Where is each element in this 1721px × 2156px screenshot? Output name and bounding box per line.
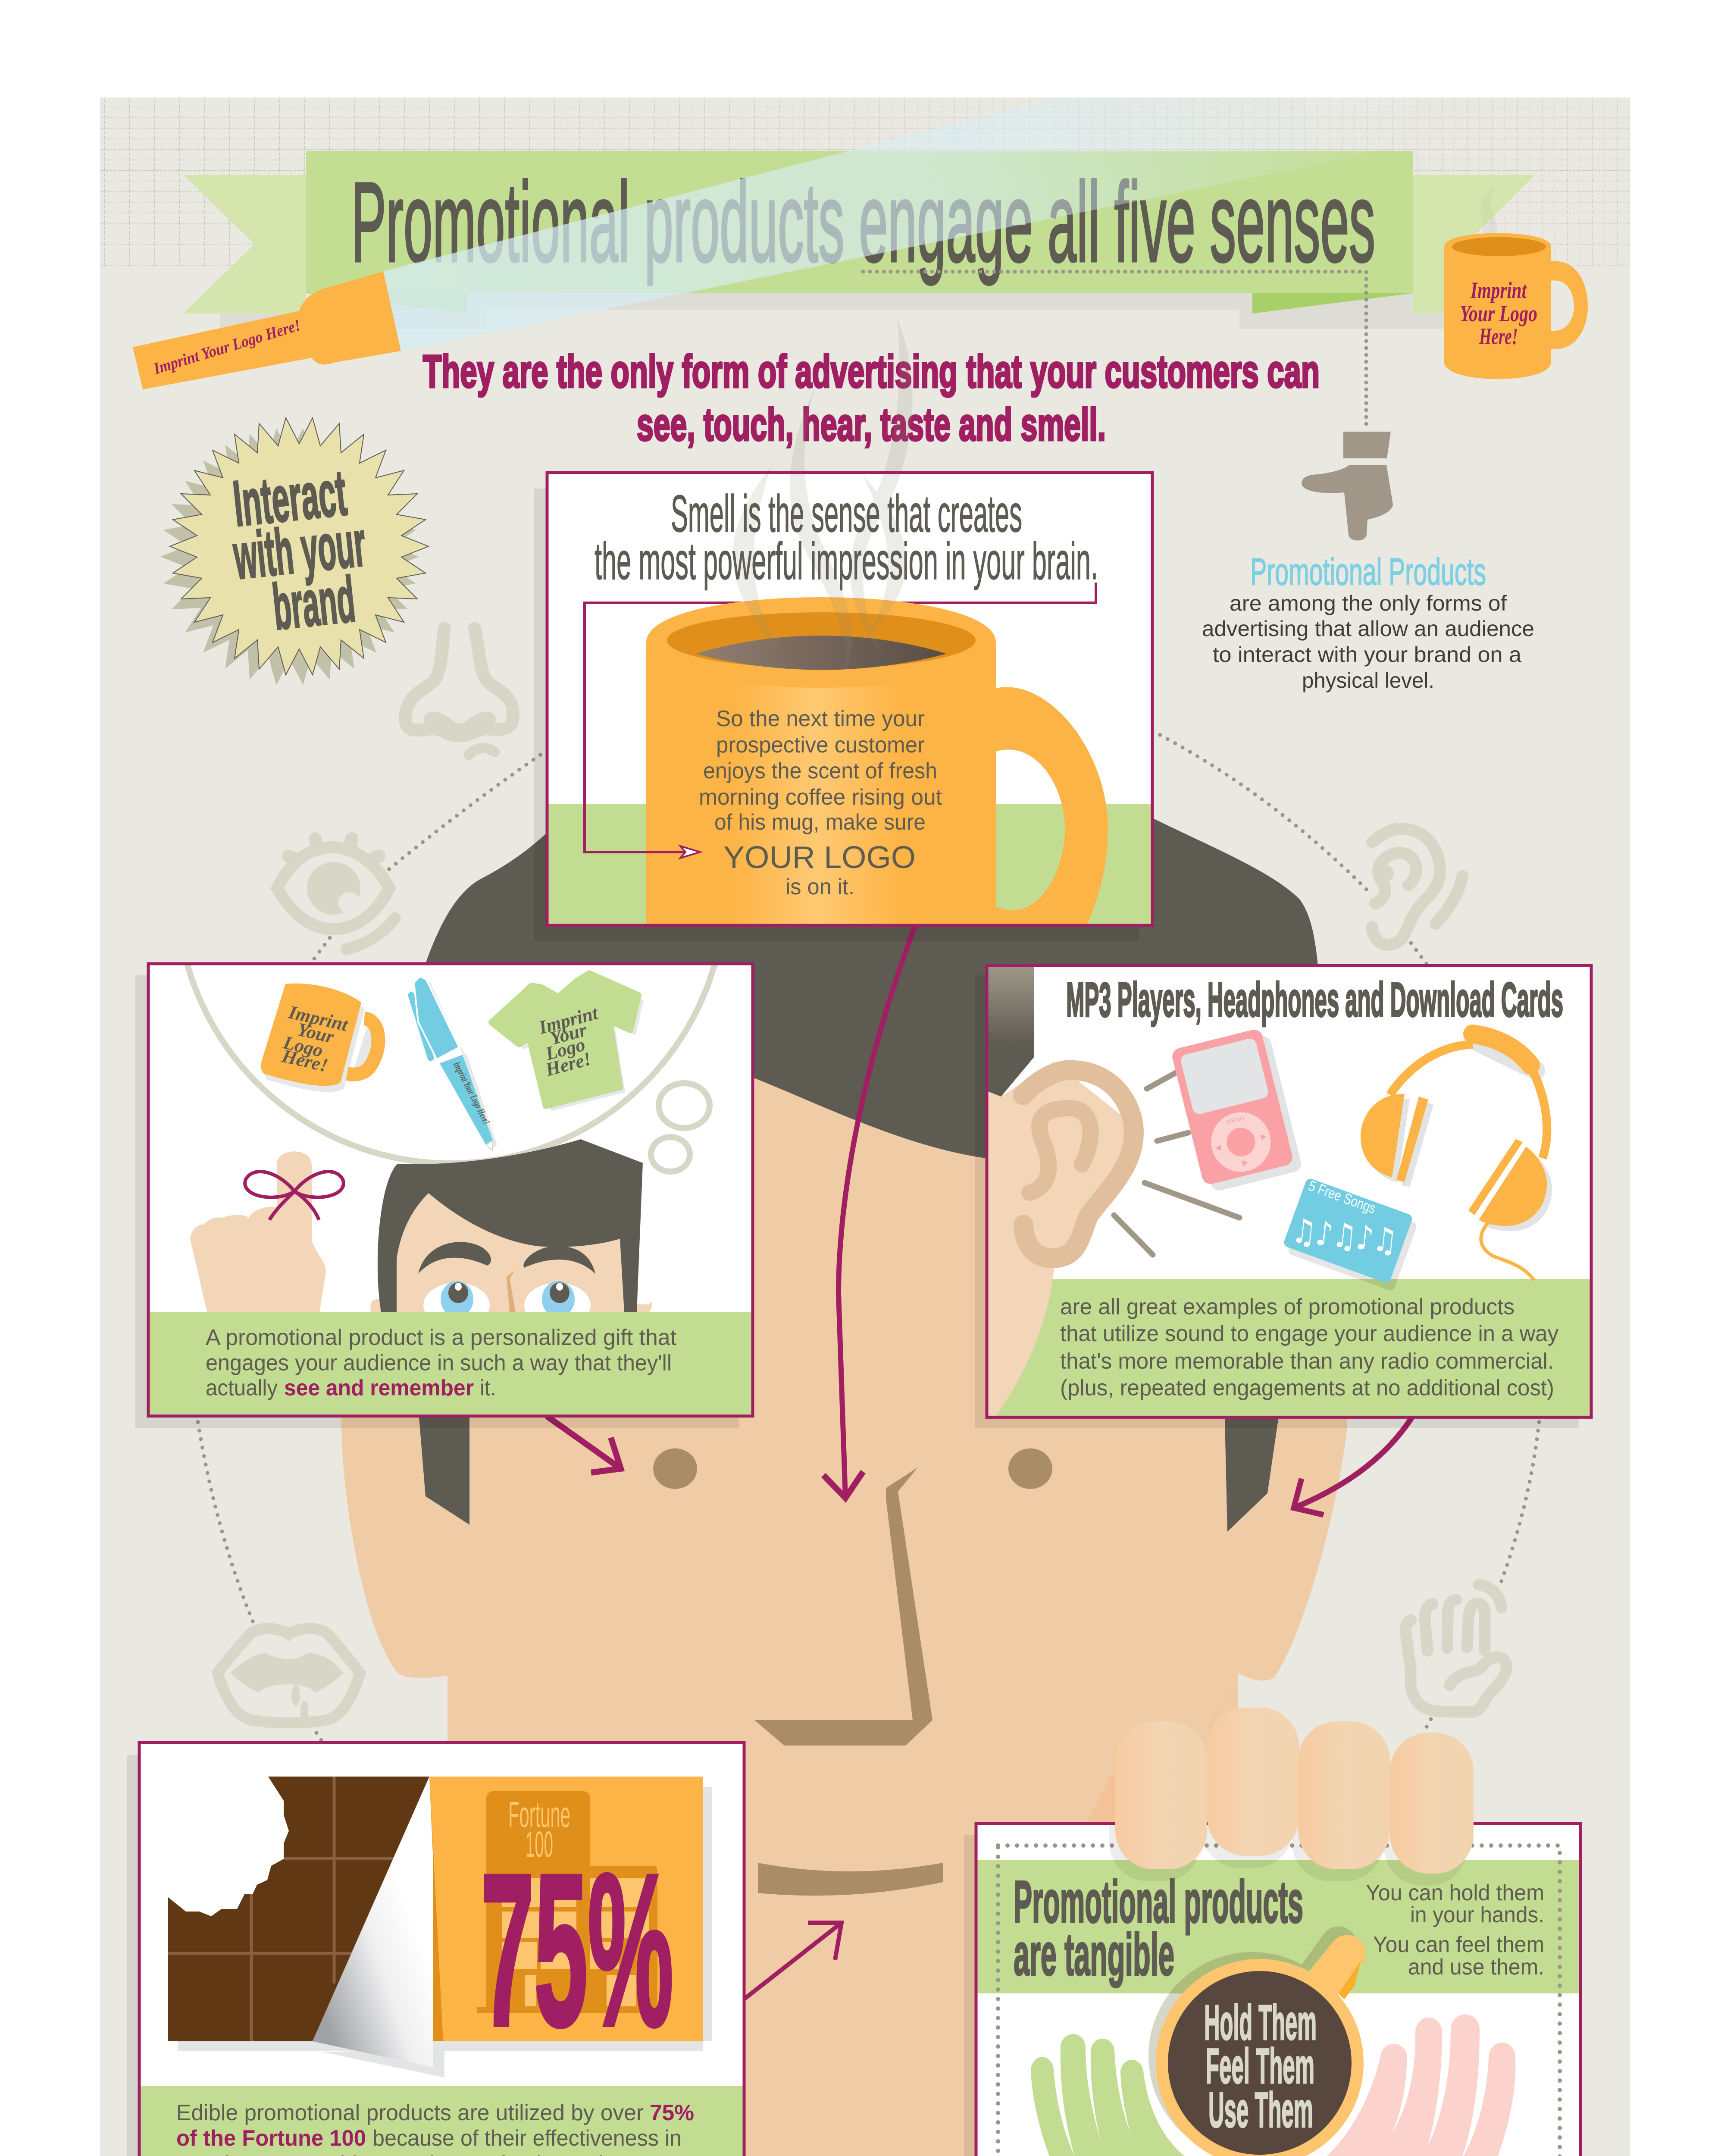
- pink hand: [1270, 2014, 1547, 2156]
- face and neck: [341, 1078, 1347, 2156]
- thought: pen: Imprint Your Logo Here!: [451, 1059, 492, 1126]
- touch text: [1366, 1880, 1544, 1980]
- thought: shirt: Imprint: [536, 1002, 601, 1038]
- hair piece: [987, 965, 1034, 1097]
- touch text: You can hold them: [1366, 1880, 1544, 1905]
- fortune 100 building: 100: [526, 1824, 553, 1865]
- touch text: and use them.: [1408, 1955, 1544, 1980]
- headphones: [1361, 1034, 1552, 1281]
- chocolate bar: [168, 1777, 429, 2041]
- connector line: [585, 583, 1096, 852]
- arrow: smell: [823, 925, 915, 1498]
- steam: [733, 317, 913, 673]
- thought: mug: Logo: [281, 1031, 325, 1061]
- mug text: enjoys the scent of fresh: [703, 758, 937, 783]
- icon: eye: [277, 839, 395, 949]
- smell heading: [595, 484, 1098, 590]
- taste caption: [176, 2100, 694, 2156]
- coffee cup from above: Use Them: [1208, 2083, 1313, 2138]
- wrapper: [429, 1777, 703, 2071]
- callout: promotional products: Promotional Products: [1250, 550, 1486, 593]
- cup shadow: [1148, 1945, 1356, 2156]
- mug text: morning coffee rising out: [699, 785, 942, 810]
- character head: [113, 818, 1606, 2156]
- mug handle: [1551, 261, 1588, 349]
- right sideburn: [1224, 1401, 1281, 1532]
- smell heading: Smell is the sense that creates: [671, 484, 1022, 543]
- chocolate shadow: [178, 1787, 712, 2051]
- icon: mouth: [218, 1629, 360, 1723]
- mp3 player: [1170, 1028, 1303, 1192]
- sight caption: engages your audience in such a way that they'll: [206, 1351, 672, 1376]
- taste caption: 75%: [650, 2100, 694, 2125]
- sight caption: [206, 1325, 677, 1401]
- ear: [1023, 1070, 1134, 1258]
- sound caption: are all great examples of promotional products: [1060, 1294, 1514, 1319]
- callout: promotional products: are among the only forms of: [1230, 591, 1507, 615]
- mug imprint: Your Logo: [1460, 301, 1537, 326]
- touch heading: [1014, 1869, 1303, 1988]
- sight caption: actually: [206, 1376, 278, 1401]
- thought: mug: [261, 984, 382, 1092]
- gripping fingers: [1115, 1708, 1474, 1874]
- badge text: brand: [269, 563, 358, 643]
- mug imprint: Imprint: [1470, 277, 1527, 303]
- icon: hand: [1405, 1585, 1506, 1712]
- thought: shirt: [491, 973, 644, 1111]
- coffee mug: [646, 597, 1108, 931]
- finger shadows: [1109, 1720, 1468, 1886]
- mug text: [699, 706, 942, 899]
- right ribbon fold: [1252, 293, 1413, 313]
- flashlight beam: [383, 97, 1423, 351]
- download card: ♫♪♫♪♫: [1290, 1211, 1399, 1261]
- mug text: YOUR LOGO: [723, 840, 916, 875]
- mouth: [758, 1863, 943, 1896]
- panel: touch: [964, 1708, 1582, 2156]
- badge text: Interact: [230, 456, 350, 540]
- arrow: taste: [744, 1923, 842, 1999]
- thought: mug: Here!: [279, 1045, 330, 1076]
- taste caption: of the Fortune 100: [176, 2126, 366, 2151]
- character portrait: [370, 1139, 652, 1328]
- mug text: So the next time your: [716, 706, 925, 731]
- fortune 100 building: Fortune: [508, 1794, 570, 1835]
- mug imprint: Here!: [1479, 323, 1518, 349]
- smell heading: the most powerful impression in your brain.: [595, 532, 1098, 590]
- left ribbon fold: [306, 293, 467, 313]
- mug text: prospective customer: [716, 733, 925, 758]
- flashlight imprint: Imprint Your Logo Here!: [151, 316, 303, 378]
- sound lines: [1114, 1073, 1239, 1255]
- title banner: [183, 151, 1535, 329]
- touch text: in your hands.: [1410, 1902, 1544, 1927]
- wrapper: 75%: [481, 1830, 673, 2071]
- callout: promotional products: to interact with your brand on a: [1213, 642, 1521, 667]
- dotted sense ring: [198, 731, 1539, 1741]
- mug text: is on it.: [785, 874, 854, 899]
- wrapper fold: [313, 1777, 444, 2078]
- mp3 player: MENU: [1226, 1114, 1245, 1125]
- hair: [425, 818, 1318, 1158]
- thought: mug: Imprint: [286, 1001, 350, 1036]
- panel: taste: [127, 1742, 744, 2156]
- dotted frame: [998, 1846, 1560, 2156]
- arrow: sound: [1294, 1416, 1413, 1515]
- coffee cup from above: Hold Them: [1204, 1995, 1317, 2050]
- badge text: [225, 454, 375, 647]
- eye left: [653, 1448, 697, 1489]
- badge: interact with your brand: [160, 418, 429, 685]
- coffee cup from above: Feel Them: [1206, 2039, 1314, 2094]
- touch heading: are tangible: [1014, 1921, 1174, 1988]
- thought: shirt: Here!: [543, 1048, 594, 1081]
- hand with finger: [190, 1151, 326, 1315]
- neck shade: [1086, 1660, 1237, 1824]
- thought bubble: [185, 965, 717, 1175]
- download card: [1283, 1177, 1418, 1292]
- icon: nose: [405, 628, 513, 755]
- sound caption: (plus, repeated engagements at no additional cost): [1060, 1376, 1554, 1401]
- icon: top right mug: [1444, 185, 1588, 379]
- sound caption: [1060, 1294, 1558, 1401]
- banner front: [306, 151, 1413, 293]
- fortune 100 building: [477, 1791, 657, 2013]
- sight caption: A promotional product is a personalized gift that: [206, 1325, 677, 1350]
- thought: mug: Your: [295, 1018, 336, 1048]
- panel: sound: [975, 965, 1591, 1428]
- touch text: You can feel them: [1373, 1932, 1544, 1957]
- dotted connector to hand: [863, 272, 1366, 427]
- sight caption: see and remember: [284, 1376, 474, 1401]
- eye right: [1008, 1448, 1052, 1489]
- subtitle: [423, 345, 1320, 450]
- ear skin: [987, 1062, 1143, 1417]
- mug text: of his mug, make sure: [714, 810, 926, 835]
- sight caption: it.: [480, 1376, 496, 1401]
- sound caption: that utilize sound to engage your audience in a way: [1060, 1321, 1558, 1346]
- ribbon bow: [245, 1172, 344, 1220]
- nose: [754, 1467, 932, 1745]
- icon: pointing hand: [1302, 432, 1393, 541]
- thought: shirt: Your: [548, 1019, 589, 1049]
- subtitle: see, touch, hear, taste and smell.: [637, 398, 1106, 450]
- callout: promotional products: [1202, 550, 1534, 693]
- arrow to logo: [646, 846, 700, 858]
- left sideburn: [418, 1401, 469, 1525]
- taste caption: Edible promotional products are utilized by over: [176, 2100, 644, 2125]
- icon: ear: [1372, 829, 1462, 945]
- badge: interact with your brand: with your: [230, 507, 369, 593]
- left ribbon tail: [183, 175, 306, 313]
- coffee cup from above: [1156, 1953, 1364, 2156]
- panel: smell: [534, 317, 1152, 941]
- top grid texture: [100, 97, 1630, 266]
- download card: 5 Free Songs: [1306, 1178, 1378, 1217]
- sound caption: that's more memorable than any radio commercial.: [1060, 1349, 1554, 1374]
- green caption strip: [148, 1312, 753, 1416]
- callout: promotional products: advertising that allow an audience: [1202, 617, 1534, 641]
- mug imprint: [1460, 277, 1537, 349]
- green hand: [1004, 2034, 1234, 2156]
- green caption strip: [987, 1279, 1591, 1417]
- panel: sight: [135, 962, 754, 1428]
- arrow: sight: [547, 1416, 621, 1473]
- right ribbon tail: [1413, 175, 1535, 313]
- thought: shirt: Logo: [543, 1034, 587, 1065]
- thought: pen: [411, 976, 497, 1150]
- banner shadow: [220, 293, 1444, 329]
- icon: flashlight: [133, 271, 401, 389]
- panel: touch: Promotional products: [1014, 1869, 1303, 1935]
- taste caption: because of their effectiveness in: [372, 2126, 682, 2151]
- callout: promotional products: physical level.: [1302, 668, 1434, 693]
